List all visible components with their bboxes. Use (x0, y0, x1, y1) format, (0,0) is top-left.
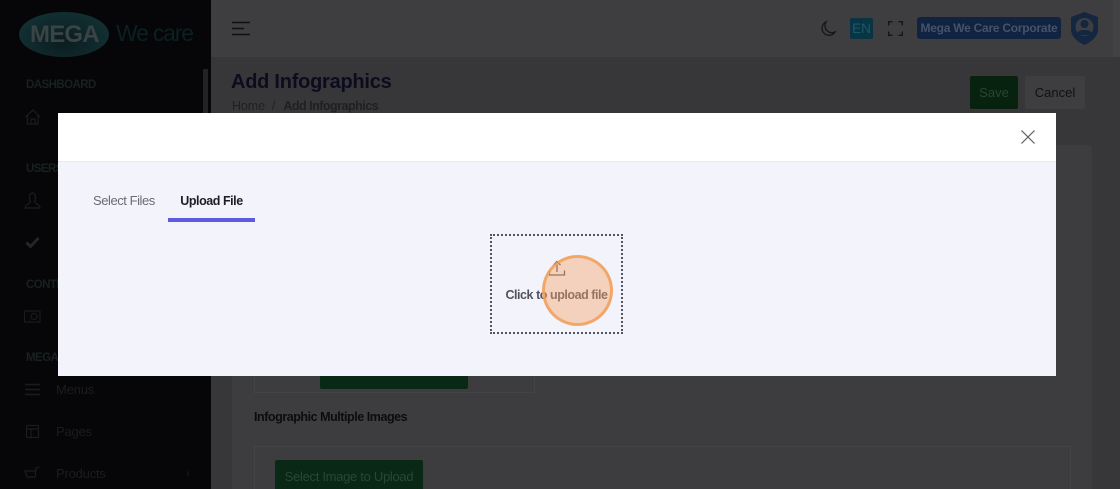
logo: MEGA (30, 21, 99, 48)
icon: camera (24, 310, 40, 322)
upload dropzone (490, 234, 623, 334)
sidebar heading: dashboard: DASHBOARD (26, 79, 96, 91)
menu item: products: Products (56, 466, 106, 481)
menu item: pages (26, 424, 92, 439)
page scrollbar track (1113, 0, 1120, 57)
background card (232, 145, 1092, 489)
sidebar (0, 0, 211, 489)
icon: user shield (1071, 12, 1098, 45)
icon: check (26, 237, 40, 248)
icon: hamburger (232, 22, 250, 36)
menu item: menus (25, 382, 94, 397)
menu item: menus: Menus (56, 382, 94, 397)
upload panel (254, 446, 1071, 489)
modal header (58, 113, 1056, 162)
logo (19, 12, 193, 57)
menu item: pages: Pages (56, 424, 92, 439)
sidebar heading: mega: MEGA (26, 352, 58, 364)
account badge (917, 17, 1061, 39)
tab: upload file (168, 194, 255, 222)
account badge: Mega We Care Corporate (920, 21, 1057, 35)
icon: moon (822, 20, 836, 36)
save button (970, 76, 1018, 109)
image field panel (254, 357, 535, 393)
icon: user (24, 192, 40, 208)
tab: select files: Select Files (93, 193, 155, 208)
sidebar scrollbar (203, 69, 208, 113)
sidebar heading: users: USERS (26, 163, 63, 175)
icon: upload (548, 260, 566, 276)
menu item: products (24, 466, 190, 481)
language badge: EN (852, 21, 871, 36)
modal (58, 113, 1056, 376)
cancel button: Cancel (1035, 85, 1075, 100)
menu item: products: › (186, 466, 190, 480)
icon: fullscreen (888, 21, 903, 36)
page title: Add Infographics (231, 71, 391, 93)
green button behind modal (320, 367, 468, 389)
top bar (211, 0, 1120, 57)
sidebar heading: content: CONTENT (26, 279, 78, 291)
section label: Infographic Multiple Images (254, 410, 407, 424)
icon: close (1021, 130, 1035, 144)
click highlight circle (542, 255, 613, 326)
logo: We care (116, 20, 193, 46)
tab: upload file: Upload File (180, 194, 243, 208)
cancel button (1025, 76, 1085, 109)
select image button (275, 460, 423, 489)
breadcrumb: Home / Add Infographics (232, 99, 378, 113)
select image button: Select Image to Upload (285, 469, 413, 484)
language badge (850, 18, 873, 39)
page content (211, 57, 1120, 489)
upload label: Click to upload file (505, 288, 608, 302)
icon: home (25, 110, 40, 124)
save button: Save (979, 85, 1009, 100)
